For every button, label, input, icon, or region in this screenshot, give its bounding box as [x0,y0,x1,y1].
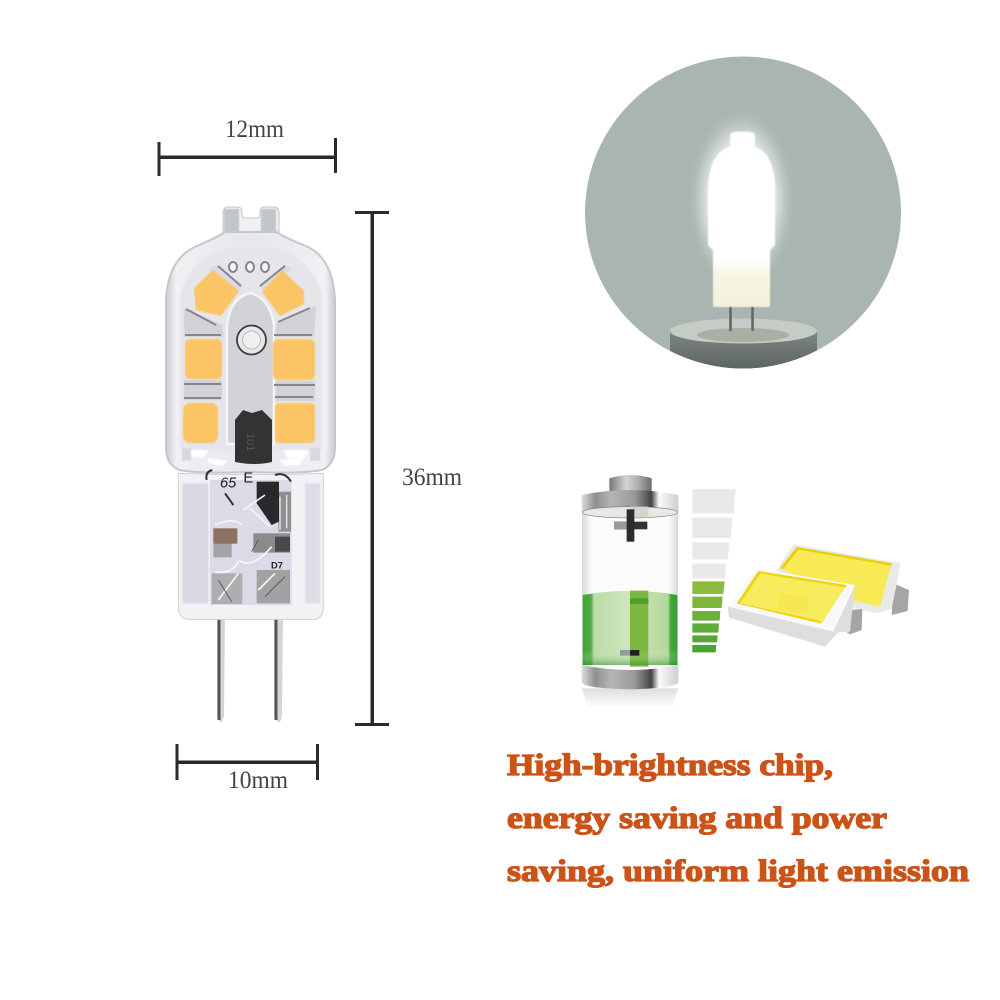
black IC on upper body [235,410,272,464]
circle background [585,56,901,368]
battery bottom metal [582,665,678,689]
photo: lit bulb in circle [585,56,901,376]
battery liquid [583,591,677,667]
circuit components [212,492,291,604]
dimension: 12mm width [158,116,337,176]
bulb lower body [178,470,323,619]
green filled levels [692,581,725,652]
bulb lower pins [217,618,283,722]
chip separators [184,266,315,398]
board markings: E [243,471,253,487]
dimension: 36mm height [355,211,463,726]
rear chip [777,544,909,615]
battery top metal [582,490,678,518]
front chip [728,568,862,647]
dimension: 36mm height: 36mm [402,464,463,491]
headline text: energy saving and power [507,800,887,835]
grey bands between chips [184,265,316,401]
dimension: 10mm pin spacing: 10mm [228,767,289,794]
lit body [708,132,775,307]
headline text [507,747,969,888]
grey empty levels [692,489,736,579]
icon: battery [582,475,678,708]
minus sign [620,650,639,656]
headline text: saving, uniform light emission [507,853,969,888]
LED chips on bulb [183,270,315,443]
product photo: G4 LED bulb [166,207,335,722]
plus sign [614,509,647,542]
bulb top tab [223,207,279,234]
pins [730,305,752,331]
black IC on upper body: 101 [244,433,256,451]
battery reflection [582,688,678,708]
dimension: 12mm width: 12mm [225,116,284,143]
board markings: D7 [271,560,283,570]
mottled band below chips [182,448,320,466]
headline text: High-brightness chip, [507,747,833,782]
charge level bars [692,489,736,652]
board markings [220,471,283,570]
icon: SMD LED chips [728,544,909,647]
dimension: 10mm pin spacing [176,744,319,794]
board markings: 65 [220,475,237,491]
bulb upper body [166,232,335,473]
bulb centre spine [227,293,274,444]
battery glass [582,507,678,667]
top vent holes [229,262,269,272]
circular contact [237,326,266,354]
glow and lit bulb [670,105,817,376]
base cap [670,318,817,368]
infographic canvas [158,56,970,888]
battery cap [609,475,652,492]
